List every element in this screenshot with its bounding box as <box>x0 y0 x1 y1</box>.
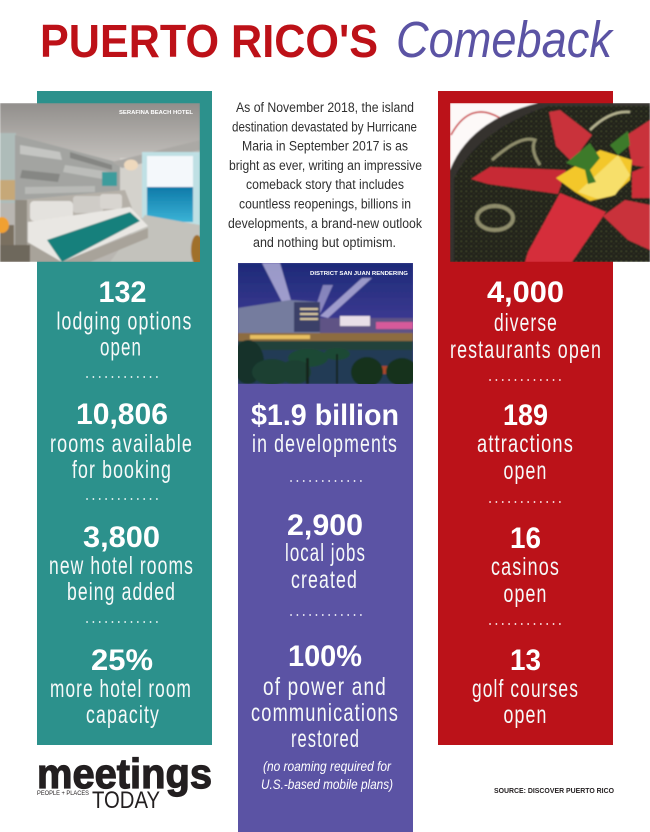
note: mobile plans: U.S.-based mobile plans) <box>261 776 393 792</box>
intro text: bright as ever, writing an impressive <box>229 158 422 173</box>
stat: 100% restored <box>251 640 399 753</box>
stat: 10,806 rooms <box>50 398 193 484</box>
intro text: As of November 2018, the island <box>236 100 414 115</box>
stat: 13 golf courses <box>472 644 579 729</box>
intro text: and nothing but optimism. <box>253 235 396 250</box>
stat: 3,800 new rooms: being added <box>67 578 176 606</box>
stat: 25% capacity: capacity <box>86 701 160 729</box>
stat: 4,000 restaurants: diverse <box>494 309 558 337</box>
stat: 3,800 new rooms <box>49 521 194 606</box>
intro text <box>228 100 422 250</box>
photo: paella <box>450 103 650 262</box>
stat: 132 lodging options: 132 <box>98 276 146 309</box>
intro text: comeback story that includes <box>246 177 404 192</box>
note: mobile plans <box>261 758 393 792</box>
source note: SOURCE: DISCOVER PUERTO RICO <box>494 786 614 795</box>
stat: 100% restored: 100% <box>288 640 362 673</box>
stat: 189 attractions: 189 <box>503 399 548 432</box>
stat: 2,900 jobs: 2,900 <box>287 509 363 542</box>
stat: 189 attractions: attractions <box>477 430 574 458</box>
stat: 189 attractions <box>477 399 574 485</box>
stat: 3,800 new rooms: 3,800 <box>83 521 160 554</box>
stat: 10,806 rooms: for booking <box>72 456 172 484</box>
photo: District San Juan rendering <box>232 263 418 387</box>
panel: developments <box>232 263 418 832</box>
stat: 16 casinos <box>491 522 560 608</box>
stat: 25% capacity: more hotel room <box>50 675 192 703</box>
intro text: countless reopenings, billions in <box>239 196 411 212</box>
stat: 25% capacity: 25% <box>91 644 153 677</box>
panel background: teal <box>37 91 212 745</box>
stat: 4,000 restaurants <box>450 276 602 364</box>
stat: 10,806 rooms: rooms available <box>50 430 193 458</box>
stat: 2,900 jobs <box>285 509 366 594</box>
stat: $1.9 billion: in developments <box>252 430 398 458</box>
stat: $1.9 billion: $1.9 billion <box>251 399 399 432</box>
title: Puerto Rico's: PUERTO RICO'S <box>40 15 378 67</box>
stat: 4,000 restaurants: 4,000 <box>487 276 564 309</box>
title <box>40 11 614 68</box>
photo caption: SERAFINA BEACH HOTEL <box>119 110 194 116</box>
photo caption: DISTRICT SAN JUAN RENDERING <box>310 271 408 277</box>
panel: lodging <box>0 91 212 745</box>
stat: $1.9 billion <box>251 399 399 458</box>
stat: 16 casinos: open <box>504 580 548 608</box>
logo: Meetings Today: TODAY <box>92 787 160 814</box>
stat: 100% restored: restored <box>291 725 360 753</box>
intro text: developments, a brand-new outlook <box>228 216 422 231</box>
intro text: Maria in September 2017 is as <box>242 139 408 154</box>
logo: Meetings Today: meetings <box>37 750 212 797</box>
stat: 25% capacity <box>50 644 192 729</box>
stat: 100% restored: communications <box>251 699 399 727</box>
panel: attractions <box>438 91 650 745</box>
stat: 16 casinos: 16 <box>510 522 541 555</box>
panel background: red <box>438 91 613 745</box>
intro text: destination devastated by Hurricane <box>232 119 417 134</box>
stat: 2,900 jobs: local jobs <box>285 539 366 567</box>
note: mobile plans: (no roaming required for <box>263 758 392 774</box>
panel background: purple <box>238 263 413 832</box>
stat: 16 casinos: casinos <box>491 553 560 581</box>
stat: 13 golf courses: golf courses <box>472 675 579 703</box>
stat: 132 lodging options: lodging options <box>56 308 192 336</box>
logo: Meetings Today: PEOPLE + PLACES <box>37 790 90 797</box>
photo: Serafina Beach Hotel room <box>0 103 203 265</box>
stat: 3,800 new rooms: new hotel rooms <box>49 552 194 580</box>
title: Comeback: Comeback <box>396 11 614 68</box>
stat: 10,806 rooms: 10,806 <box>76 398 168 431</box>
stat: 100% restored: of power and <box>263 673 387 701</box>
stat: 13 golf courses: 13 <box>510 644 541 677</box>
stat: 132 lodging options <box>56 276 192 362</box>
stat: 189 attractions: open <box>504 457 548 485</box>
stat: 132 lodging options: open <box>100 334 142 362</box>
stat: 13 golf courses: open <box>504 701 548 729</box>
stat: 2,900 jobs: created <box>291 566 358 594</box>
